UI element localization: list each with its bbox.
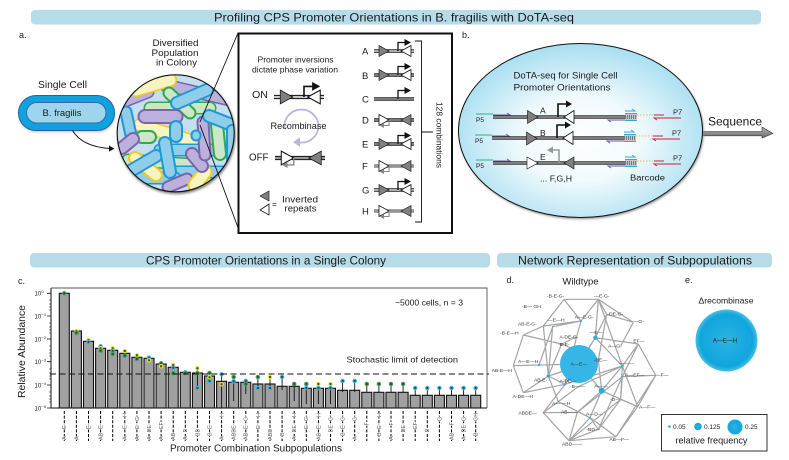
x axis combination labels: F [449,422,455,426]
x axis combination labels: AB [449,432,455,440]
x axis combination labels: E [340,425,346,429]
legend: relative frequency: 0.125 [704,424,721,431]
single cell [18,80,115,132]
panel: droplet with DoTA-seq [458,44,704,219]
chart notes: Stochastic limit of detection [346,354,458,364]
panel d label: d. [506,275,514,285]
x axis combination labels: E [304,425,310,429]
x axis combination labels: D [183,428,189,432]
x axis combination labels: E [123,425,129,429]
y axis ticks: −3 [42,358,47,362]
colony label: in Colony [156,58,197,68]
node labels: -DE— [594,358,607,364]
off construct: OFF [249,152,268,164]
x axis combination labels: A [220,436,226,440]
x axis combination labels: A [462,436,468,440]
network edges [513,299,656,441]
large node A-E [560,345,598,383]
x axis combination labels: G [340,417,346,421]
combination rows: E [362,140,368,150]
x axis combination labels: H [292,413,298,417]
detection limit line [50,373,489,375]
legend: relative frequency: 0.05 [673,424,686,431]
node labels: AB-E- [534,378,548,384]
combination rows: A [362,46,369,58]
arrow: sequence [700,116,773,138]
colony label [152,38,198,68]
legend: relative frequency: relative frequency [676,436,748,446]
x axis combination labels: E [316,425,322,429]
x axis combination labels: E [135,425,141,429]
network graph [492,294,669,448]
x axis combination labels: ABDE [232,425,238,440]
x axis combination labels: A [135,436,141,440]
x axis combination labels: A [353,436,359,440]
y axis ticks: 10 [34,314,42,320]
node labels: A—— [594,383,608,389]
legend: relative frequency: 0.25 [745,424,758,431]
x axis combination labels: E [86,425,92,429]
node labels: AB—F— [609,437,629,443]
x axis combination labels: E [98,425,104,429]
x axis combination labels: E [207,425,213,429]
recombinase cycle: Recombinase [270,121,326,131]
promoter inversions text [252,54,338,74]
x axis combination labels: E [377,425,383,429]
x axis combination labels: DE [401,425,407,432]
y axis ticks: 10 [34,292,42,298]
droplet notes [540,172,665,184]
x axis combination labels: DE [147,425,153,432]
node labels: A— —H [552,401,571,407]
y axis ticks: 10 [34,360,42,366]
x axis combination labels: G [353,417,359,421]
x axis combination labels: DE [328,425,334,432]
combination rows: H [362,206,369,218]
combination rows: G [362,186,369,196]
x axis combination labels: D [425,428,431,432]
x axis combination labels: DE [292,425,298,432]
node labels: A—F— [639,405,655,411]
x axis combination labels: B [377,432,383,436]
x axis combination labels: ABD [268,429,274,440]
node labels: ABDE— [518,411,537,417]
node labels: AB-E-G- [518,322,537,328]
panel e label: e. [685,275,693,285]
node labels: -B— GH [522,304,541,310]
y axis ticks: −1 [42,312,47,317]
wildtype title: Wildtype [562,276,598,286]
colony circle of bacteria [117,74,236,194]
promoter inversions text: Promoter inversions [258,54,334,64]
combination rows: B [362,71,368,82]
recombinase cycle [270,110,326,147]
combination rows [362,39,414,219]
heading bar: profiling: Profiling CPS Promoter Orientations in B. fragilis with DoTA-seq [214,10,574,24]
x axis combination labels: AB [98,432,104,440]
x axis combination labels: G [328,417,334,421]
node labels: A—G- [608,343,622,349]
droplet heading: Promoter Orientations [514,82,611,92]
node labels: -D— [610,397,620,403]
node labels: A—D— [586,412,603,418]
x axis combination labels: AB [316,432,322,440]
combination rows: F [362,162,368,172]
x axis combination labels: A [159,436,165,440]
droplet notes: ... F,G,H [540,174,572,184]
x axis combination labels: A [62,436,68,440]
node labels: A—E— [571,362,587,368]
node labels: AB—— [561,410,578,416]
node labels: -B-E—H [500,330,519,336]
y axis ticks: 0 [42,289,44,294]
delta recombinase node [696,310,758,372]
node labels: A-DE— [559,378,576,384]
x axis combination labels: H [256,413,262,417]
y axis ticks: 10 [34,338,42,344]
y axis ticks: −4 [42,381,47,386]
y axis ticks: 10 [34,406,42,412]
arrow: sequence: Sequence [708,116,762,128]
inverted repeats legend: = [272,200,277,209]
x axis combination labels: F [389,422,395,426]
node labels: -B—— [570,384,585,390]
x axis combination labels: A [292,436,298,440]
x axis combination labels: F [365,422,371,426]
y axis title: Relative Abundance [17,305,28,398]
row E [476,146,682,170]
panel a label: a. [19,30,27,40]
plot frame [51,288,487,408]
node labels: EF— [633,338,645,344]
node labels: —E-G- [594,294,610,300]
node labels: -BD— [586,427,600,433]
heading bar: single colony: CPS Promoter Orientations in a Single Colony [146,254,386,268]
bracket and 128 combinations [415,41,444,222]
x axis combination labels: H [220,413,226,417]
row A [476,100,682,124]
panel b label: b. [462,30,470,40]
x axis combination labels: H [123,413,129,417]
node labels: —E— [589,330,603,336]
x axis combination labels: E [244,425,250,429]
replicate dots [63,292,477,390]
droplet notes: Barcode [630,172,665,182]
node labels: A—E—H [518,359,539,365]
x axis combination labels: G [437,417,443,421]
node labels: A—E-G- [575,315,594,321]
x axis combination labels [62,411,480,441]
delta recombinase title: Δrecombinase [698,296,754,306]
x axis combination labels: A [147,436,153,440]
panel c label: c. [18,276,25,286]
x axis combination labels: B [340,432,346,436]
x axis combination labels: EF [413,421,419,429]
legend: relative frequency [662,414,767,451]
inverted repeats legend: Inverted [282,194,318,204]
single cell: B. fragilis [42,108,82,118]
x axis combination labels: EF [159,421,165,429]
row A: A [540,106,546,116]
node labels: —F— [656,373,669,379]
delta recombinase node: A—E—H [713,338,737,344]
inverted repeats legend [260,191,318,215]
inverted repeats legend: repeats [284,204,317,214]
node labels: -DE-G- [607,312,623,318]
arrow: cell to colony [72,130,114,152]
node labels: A-DE—H [513,394,534,400]
node labels: ——— [619,361,634,367]
node labels: -B-E- [558,342,570,348]
node labels: -B-E-G- [547,294,565,300]
heading bar: single colony [30,253,490,268]
row B [475,122,681,145]
zoom lines to box [200,33,240,233]
row B: B [540,128,546,138]
colony label: Population [152,48,198,59]
colony label: Diversified [152,38,198,49]
droplet heading: DoTA-seq for Single Cell [514,70,618,80]
small nodes [538,320,624,418]
on construct [252,82,324,104]
on construct: ON [252,89,268,101]
x axis combination labels: AB [244,432,250,440]
bracket and 128 combinations: 128 combinations [434,102,444,168]
x axis combination labels: B [474,432,480,436]
panel: promoter box [238,34,452,233]
y axis ticks: −2 [42,335,47,340]
x axis combination labels: B [280,432,286,436]
node labels: ABD—— [562,442,582,448]
y axis ticks: −5 [42,404,47,409]
bars [59,293,481,408]
droplet heading [514,70,618,92]
x axis combination labels: A [183,436,189,440]
x axis combination labels: A [123,436,129,440]
x axis combination labels: AB [171,432,177,440]
x axis combination labels: G [462,417,468,421]
heading bar: network: Network Representation of Subpopulations [518,254,752,268]
node labels: A—EF— [625,373,645,379]
y axis ticks: 10 [34,384,42,390]
x axis combination labels: H [377,413,383,417]
node labels: —E—H [548,317,565,323]
x axis combination labels: A [74,436,80,440]
node labels: —G- [633,319,644,325]
chart notes [346,298,463,364]
off construct [249,151,325,168]
node labels: AB-E—H [492,368,512,374]
bar chart [17,288,489,454]
combination rows: C [362,94,369,106]
x axis combination labels: D [195,428,201,432]
single cell: Single Cell [38,80,87,91]
promoter inversions text: dictate phase variation [252,64,338,74]
x axis combination labels: DE [462,425,468,432]
x axis title: Promoter Combination Subpopulations [170,444,342,454]
x axis combination labels: GH [474,413,480,421]
combination rows: D [362,116,369,126]
node labels: A-DE-G- [559,334,579,340]
x axis combination labels: B [207,432,213,436]
row E: E [540,152,546,162]
x axis combination labels: G [304,417,310,421]
x axis combination labels: G [244,417,250,421]
x axis combination labels: G [135,417,141,421]
x axis combination labels: E [256,425,262,429]
error bars [197,368,476,408]
x axis combination labels: A [389,436,395,440]
y axis ticks [34,289,51,412]
node labels [492,294,669,448]
x axis combination labels: E [62,425,68,429]
heading bar: profiling [31,10,761,24]
chart notes: ~5000 cells, n = 3 [395,298,463,308]
x axis combination labels: B [195,432,201,436]
x axis combination labels: H [316,413,322,417]
